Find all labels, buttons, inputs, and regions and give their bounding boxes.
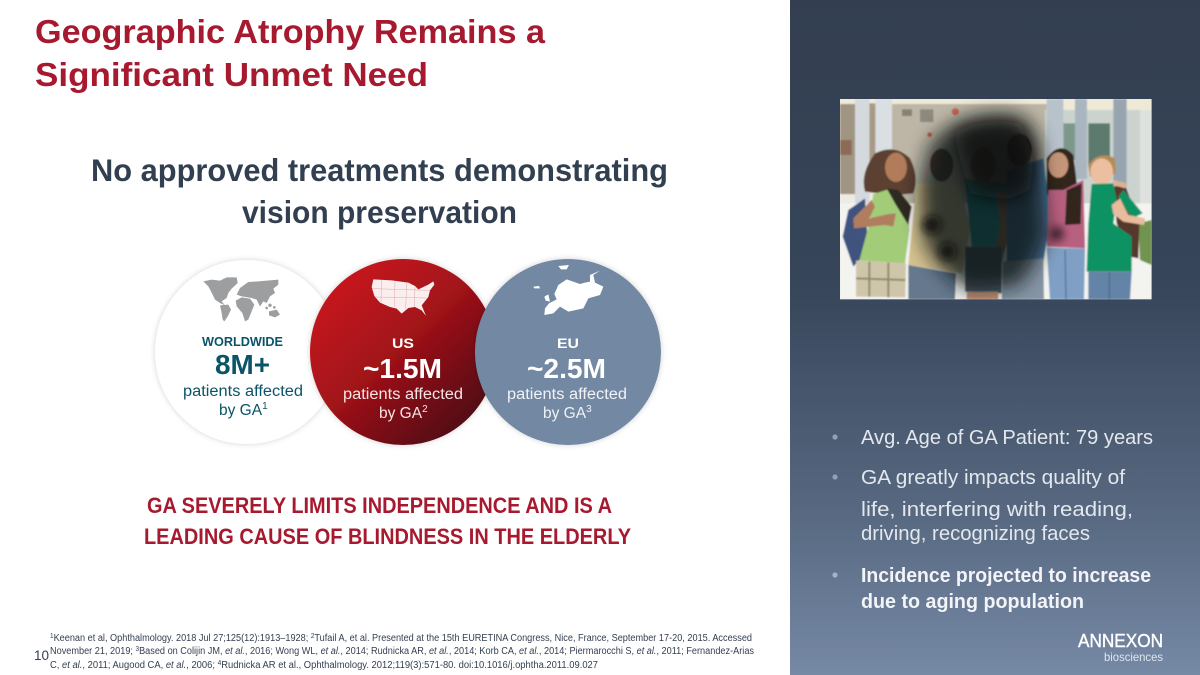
bullet: incidence projected: Incidence projected to increase <box>861 564 1151 587</box>
circle: US <box>310 259 496 445</box>
bullet: quality of life: GA greatly impacts quality of <box>861 466 1125 489</box>
logo: Annexon biosciences: biosciences <box>1104 650 1163 664</box>
footnotes: et al., 2016; Wong WL, et al., 2014; Rudnicka AR, et al., 2014; Korb CA, et al., 2014; Piermarocchi S, et al., 2011; Fernandez-Arias <box>225 646 763 657</box>
footnotes: Based on Colijin JM, <box>139 646 225 657</box>
text: by GA 2: 2 <box>422 404 428 415</box>
right panel background <box>790 0 1200 675</box>
text: by GA 2: by GA <box>379 405 422 422</box>
text: patients affected: patients affected <box>343 386 463 403</box>
icon: US map <box>372 279 434 316</box>
heading: no approved treatments: vision preservation <box>242 194 517 230</box>
footnotes: 4 <box>218 660 221 667</box>
footnotes: 1 <box>50 633 54 640</box>
footnotes: 3 <box>135 646 139 653</box>
girl 5 <box>1046 147 1078 196</box>
text: patients affected: patients affected <box>507 386 627 403</box>
bullet: quality of life <box>832 466 1133 545</box>
logo: Annexon biosciences: ANNEXON <box>1078 631 1163 651</box>
title: Significant Unmet Need <box>35 57 428 94</box>
girl 1 <box>843 198 868 267</box>
callout: GA limits independence <box>144 493 631 549</box>
callout: GA limits independence: LEADING CAUSE OF BLINDNESS IN THE ELDERLY <box>144 524 631 549</box>
circle: EU <box>475 259 661 445</box>
text: patients affected: patients affected <box>183 383 303 400</box>
bullet: incidence projected: due to aging population <box>861 590 1084 613</box>
footnotes: Rudnicka AR et al., Ophthalmology. 2012;119(3):571-80. doi:10.1016/j.ophtha.2011.09.027 <box>221 660 598 671</box>
footnotes <box>50 633 754 671</box>
title <box>35 14 545 94</box>
vision loss dark area <box>920 114 1064 290</box>
bullet list <box>832 426 1153 613</box>
photo: children with simulated central vision loss <box>840 99 1152 299</box>
text: ~2.5M: ~2.5M <box>527 353 606 384</box>
text: by GA 1: 1 <box>262 401 268 412</box>
bullet: incidence projected <box>832 564 1151 613</box>
text: 8M+: 8M+ <box>215 349 270 380</box>
bullet: average age: Avg. Age of GA Patient: 79 years <box>861 426 1153 449</box>
boy 6 <box>1113 185 1139 258</box>
footnotes: 2 <box>311 633 314 640</box>
text: by GA 1: by GA <box>219 402 262 419</box>
circle: worldwide <box>155 260 339 444</box>
girl 3 <box>971 148 996 182</box>
callout: GA limits independence: GA SEVERELY LIMITS INDEPENDENCE AND IS A <box>147 493 612 518</box>
heading: no approved treatments <box>91 152 668 230</box>
footnotes: Keenan et al, Ophthalmology. 2018 Jul 27;125(12):1913–1928; <box>54 633 311 644</box>
text: US label: US <box>392 336 414 351</box>
heading: no approved treatments: No approved treatments demonstrating <box>91 152 668 188</box>
footnotes: C, et al., 2011; Augood CA, et al., 2006; <box>50 660 217 671</box>
bullet: quality of life: life, interfering with reading, <box>861 498 1133 521</box>
text: EU label: EU <box>557 336 579 351</box>
footnotes: November 21, 2019; <box>50 646 141 657</box>
boy 4 <box>1011 134 1032 164</box>
footnotes: Tufail A, et al. Presented at the 15th EURETINA Congress, Nice, France, September 17-20, 2015. Accessed <box>314 633 752 644</box>
boy 2 <box>930 148 953 182</box>
bullet: quality of life: driving, recognizing faces <box>861 522 1090 545</box>
text: by GA 3: by GA <box>543 405 586 422</box>
text: by GA 3: 3 <box>586 404 592 415</box>
logo: Annexon biosciences <box>1078 631 1163 664</box>
icon: Europe map <box>533 265 603 315</box>
circle group: patient statistics <box>155 259 661 445</box>
text: worldwide label: WORLDWIDE <box>202 334 283 349</box>
page number: 10 <box>34 648 49 663</box>
icon: world map <box>203 277 280 321</box>
text: ~1.5M: ~1.5M <box>363 353 442 384</box>
title: Geographic Atrophy Remains a <box>35 14 545 51</box>
